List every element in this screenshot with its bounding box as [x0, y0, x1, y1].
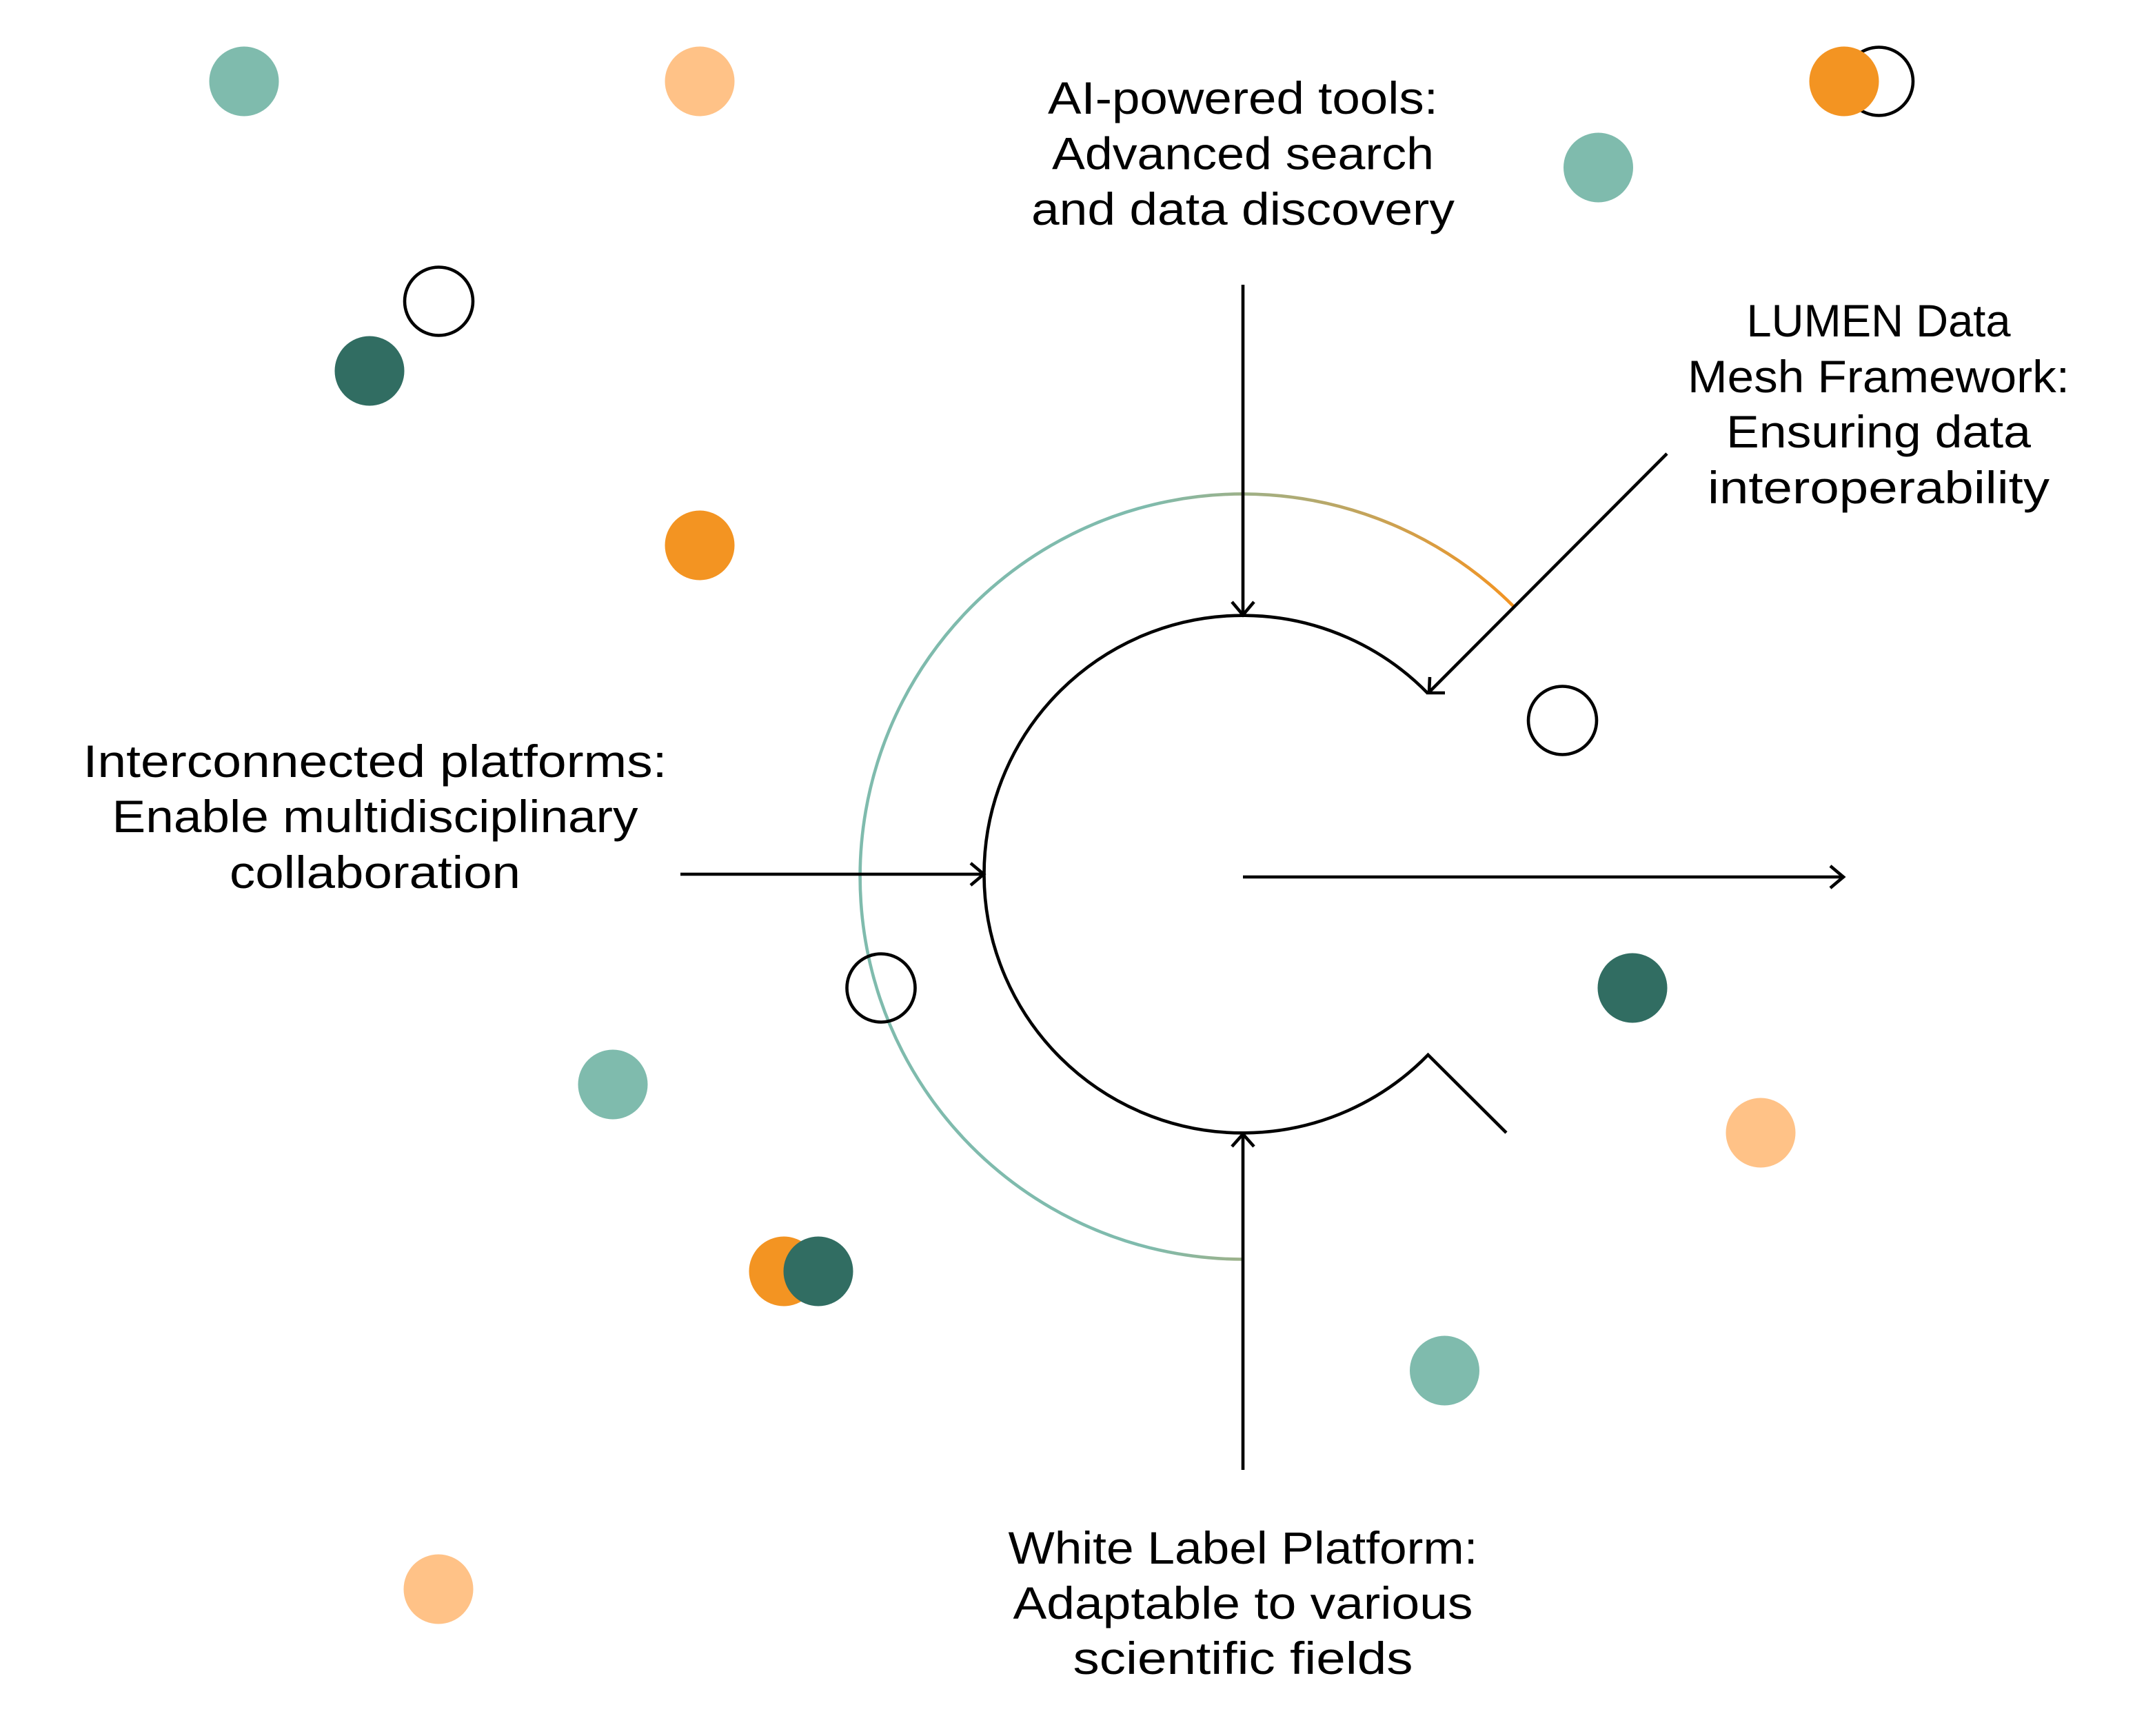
arrow: from White Label Platform	[1232, 1134, 1254, 1470]
arrow: from LUMEN Data Mesh Framework	[1429, 454, 1667, 693]
text: LUMEN Data Mesh Framework: LUMEN Data	[1747, 295, 2011, 346]
dot: dark green upper left	[335, 336, 404, 405]
text: White Label Platform: Adaptable to various	[1013, 1577, 1473, 1628]
dots: scattered decorative circles	[210, 47, 1913, 1624]
dot: teal top left	[210, 47, 279, 116]
text: LUMEN Data Mesh Framework: Ensuring data	[1726, 406, 2031, 457]
inner C shape	[984, 616, 1506, 1133]
dot: teal upper right	[1564, 132, 1633, 203]
text: White Label Platform: White Label Platform:	[1008, 1522, 1478, 1573]
dot: orange left	[665, 510, 735, 581]
text: LUMEN Data Mesh Framework: interoperability	[1708, 462, 2050, 513]
dot: dark green right	[1598, 953, 1667, 1023]
dot: peach bottom left	[404, 1554, 473, 1624]
text: AI-powered tools: and data discovery	[1031, 183, 1455, 234]
text: AI-powered tools: Advanced search	[1052, 128, 1434, 179]
dot: orange top right	[1809, 47, 1879, 116]
dot: outline on outer arc	[847, 954, 915, 1022]
outer gradient arc	[860, 494, 1513, 1260]
dot: teal lower left	[578, 1049, 648, 1120]
text: LUMEN Data Mesh Framework	[1688, 295, 2070, 513]
text: LUMEN Data Mesh Framework: Mesh Framework:	[1688, 351, 2070, 402]
text: AI-powered tools	[1031, 72, 1455, 234]
text: Interconnected platforms	[83, 736, 667, 898]
text: Interconnected platforms: Interconnected platforms:	[83, 736, 667, 787]
text: AI-powered tools: AI-powered tools:	[1048, 72, 1438, 123]
text: White Label Platform	[1008, 1522, 1478, 1684]
dot: teal bottom	[1410, 1336, 1479, 1405]
dot: peach top	[665, 47, 735, 116]
arrow: from Interconnected platforms	[680, 863, 984, 885]
dot: outline top right	[1845, 47, 1913, 116]
text: Interconnected platforms: collaboration	[230, 847, 520, 898]
arrow: from AI-powered tools	[1232, 285, 1254, 615]
dot: dark green lower left	[783, 1237, 853, 1306]
dot: orange lower left	[749, 1237, 819, 1306]
dot: outline near C opening	[1528, 687, 1597, 754]
text: Interconnected platforms: Enable multidisciplinary	[112, 791, 638, 842]
arrow: center to right output	[1243, 866, 1843, 888]
dot: peach lower right	[1726, 1098, 1795, 1168]
text: White Label Platform: scientific fields	[1073, 1633, 1413, 1684]
dot: outline upper left	[405, 268, 473, 335]
